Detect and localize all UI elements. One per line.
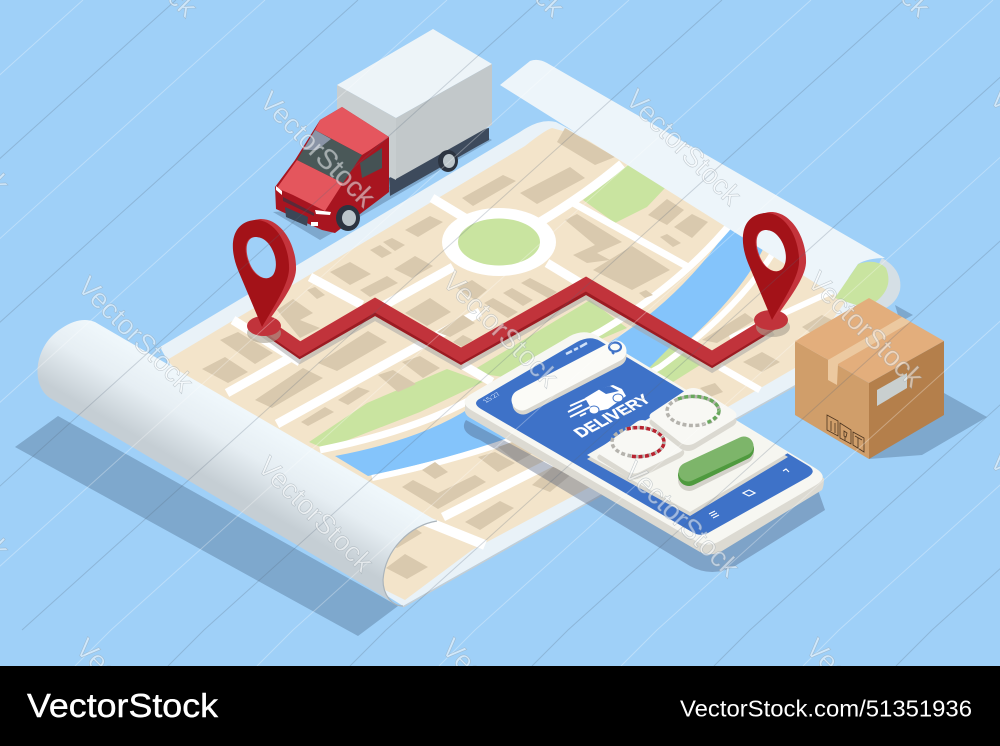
map parks	[309, 165, 700, 449]
navigation icons	[709, 469, 789, 518]
smartphone	[464, 332, 824, 554]
delivery truck	[273, 29, 492, 240]
card with red ring	[597, 426, 684, 480]
shipping label	[877, 373, 907, 406]
city blocks	[202, 128, 838, 579]
footer image id: VectorStock.com/51351936	[680, 696, 972, 722]
top paper roll	[500, 60, 900, 311]
box faces	[795, 298, 944, 383]
cargo box	[337, 29, 492, 118]
grille and lights	[285, 207, 308, 226]
roll interior (green park)	[835, 262, 888, 307]
map pin: start	[233, 219, 296, 343]
watermark text: VectorStock	[437, 265, 565, 394]
watermark text: VectorStock	[620, 83, 748, 212]
truck shadow	[273, 132, 492, 240]
lower control panel	[587, 398, 788, 516]
handling symbols	[827, 415, 864, 452]
delivery label: DELIVERY	[570, 392, 655, 441]
shadow under phone	[464, 420, 825, 572]
map streets	[227, 164, 835, 545]
watermark text: VectorStock	[254, 85, 382, 214]
roundabout	[442, 208, 556, 276]
panel: folded city map sheet	[160, 121, 890, 607]
footer bar	[0, 666, 1000, 746]
watermark text: VectorStock	[252, 450, 380, 579]
shadow of the front paper roll	[15, 416, 398, 636]
roll outer strip	[500, 60, 885, 296]
map paper edge	[160, 121, 890, 606]
side window	[360, 148, 382, 178]
cab	[275, 107, 389, 233]
card with green ring	[650, 394, 736, 451]
search bar	[523, 356, 616, 404]
search icon	[609, 342, 621, 354]
phone body	[465, 403, 824, 554]
packing tape	[828, 317, 911, 385]
map pin: destination	[743, 212, 806, 337]
watermark text: VectorStock	[72, 270, 200, 399]
front paper roll	[38, 320, 437, 606]
roll rim	[860, 258, 900, 311]
green button	[689, 453, 743, 480]
rear wheel	[438, 150, 458, 172]
phone screen	[476, 338, 813, 535]
footer brand: VectorStock	[27, 688, 218, 725]
river	[335, 224, 766, 476]
windshield	[297, 130, 362, 183]
map land	[167, 128, 850, 600]
watermark text: VectorStock	[618, 455, 746, 584]
cardboard box	[795, 298, 987, 459]
status bar: 15:27	[482, 392, 503, 404]
box shadow	[869, 393, 987, 459]
watermark text: VectorStock	[802, 265, 930, 394]
front wheel	[336, 205, 360, 231]
delivery van icon	[568, 385, 626, 417]
route line	[264, 284, 771, 365]
chassis	[389, 128, 489, 196]
